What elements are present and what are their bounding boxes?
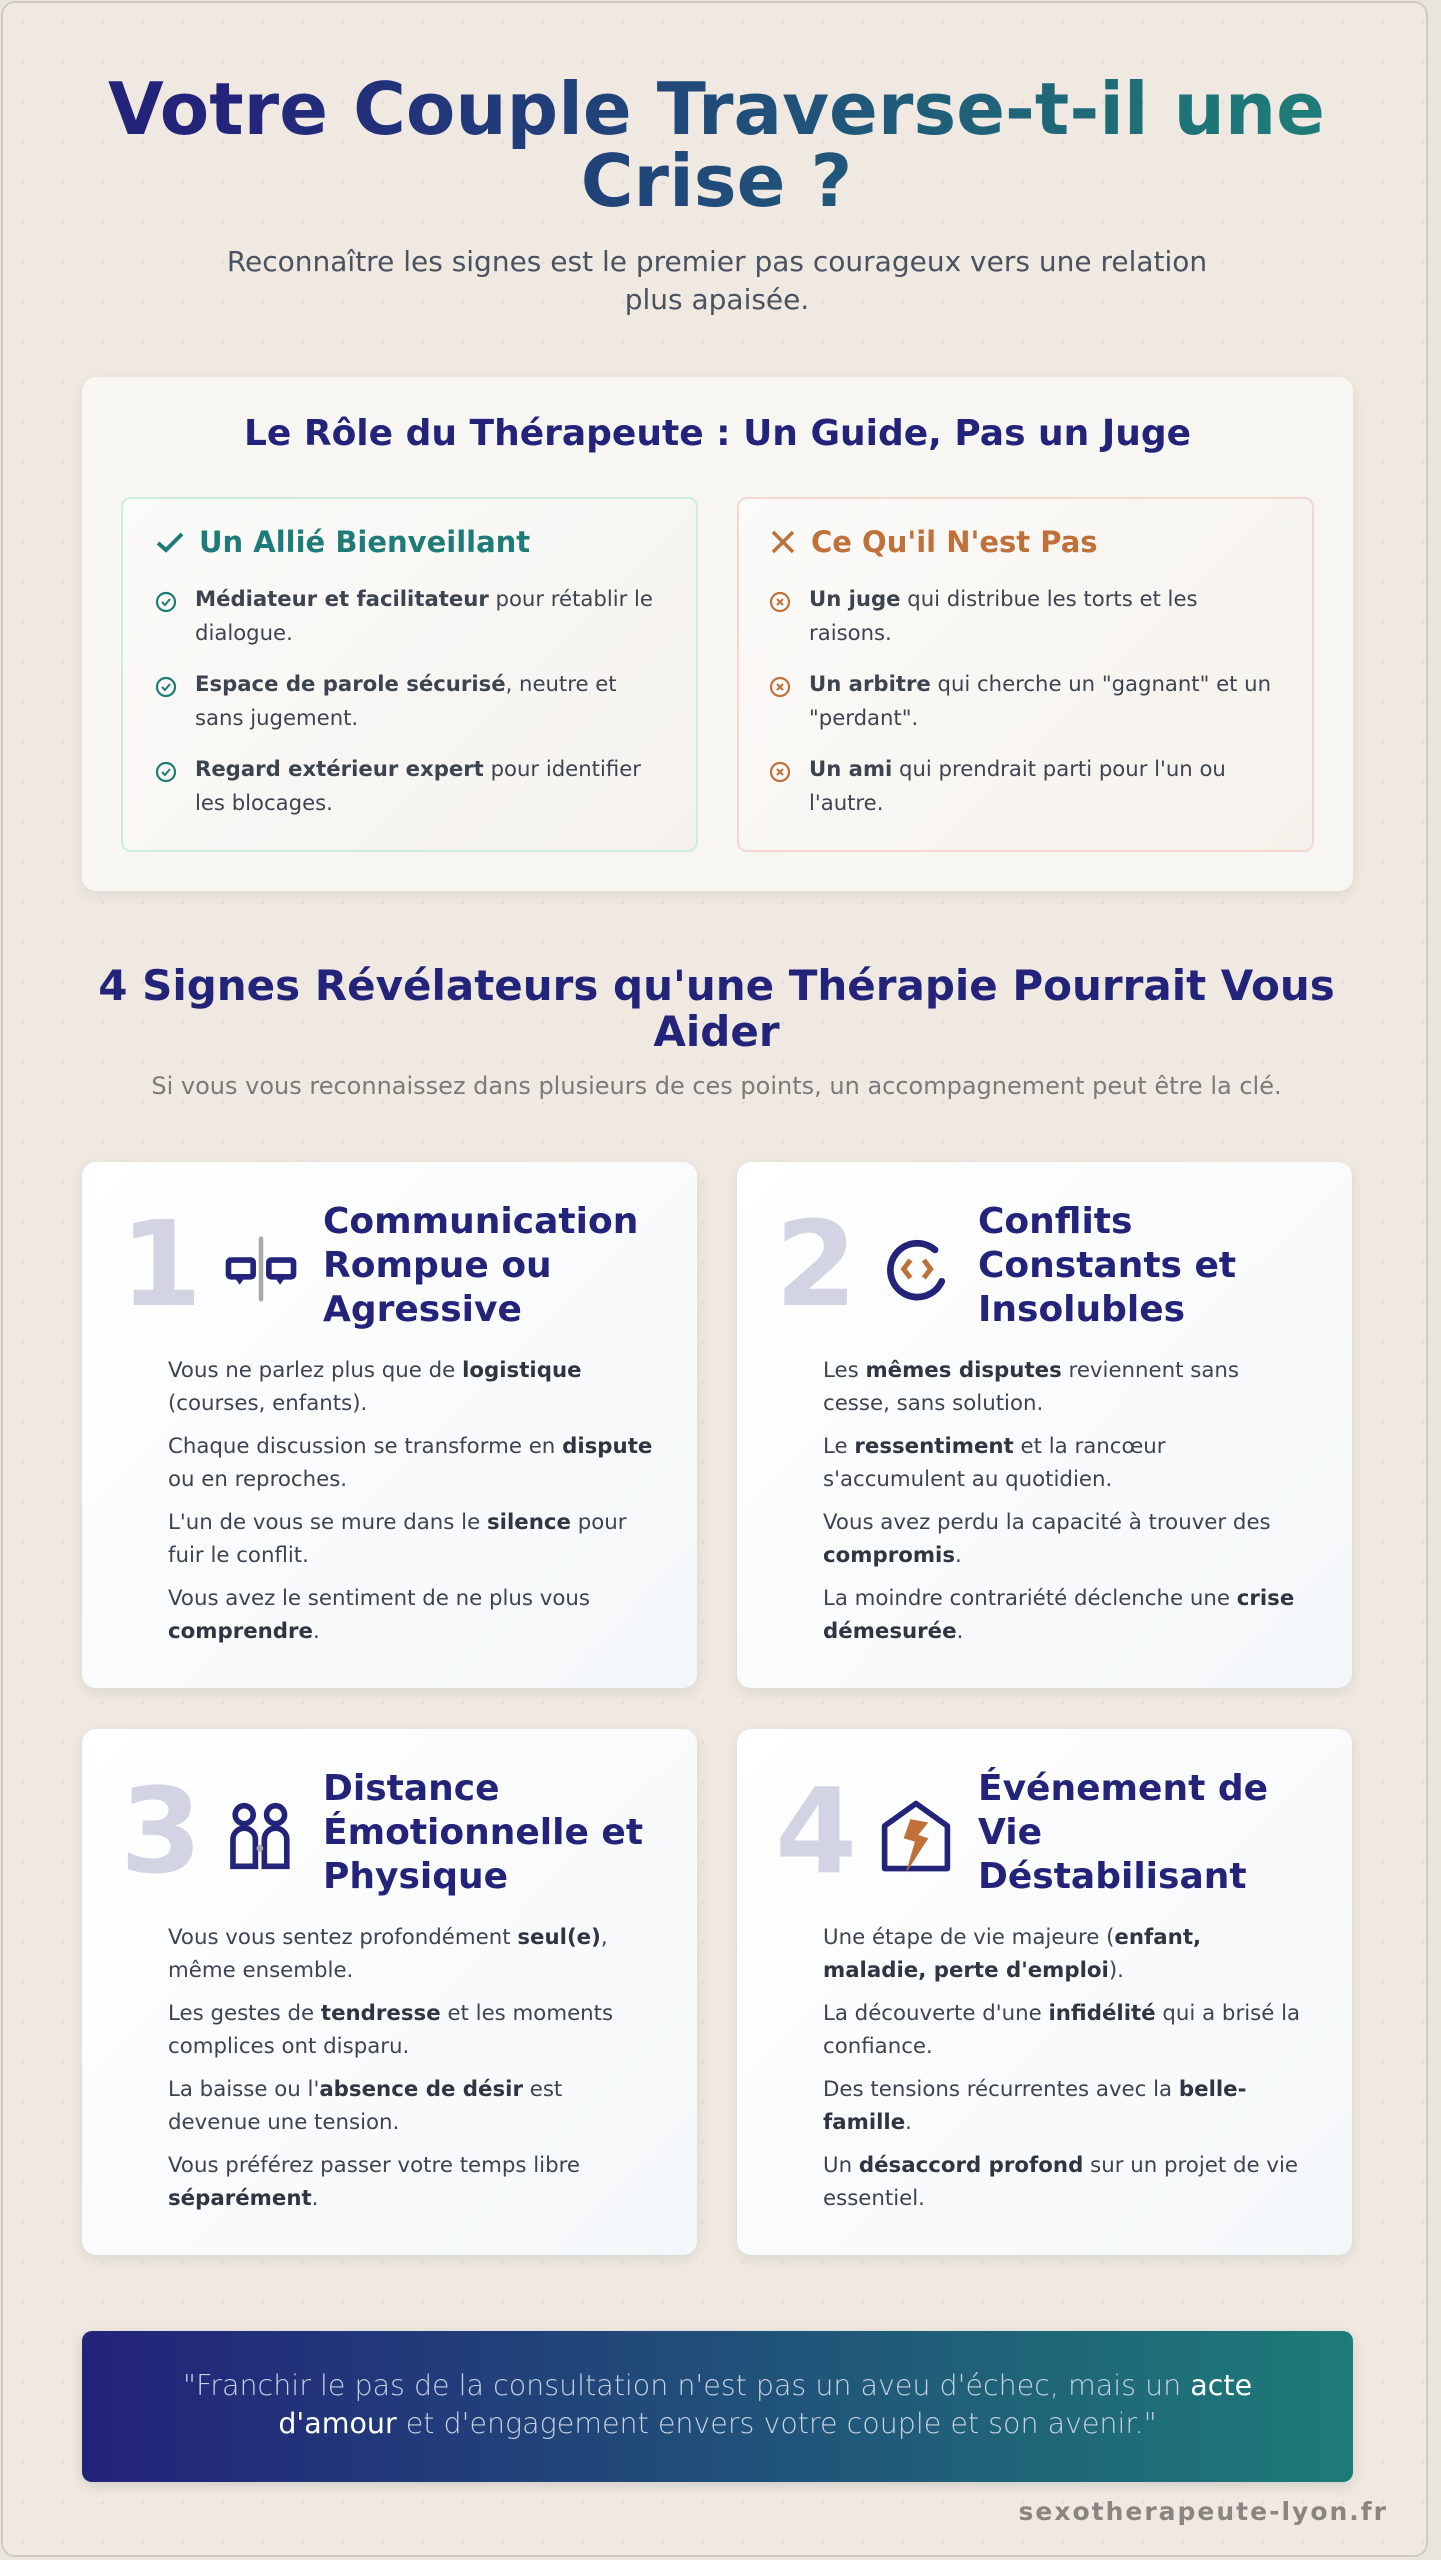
card body: Le ressentiment et la rancœur s'accumulent au quotidien. <box>823 1434 1166 1492</box>
box: what it is not: Un ami qui prendrait parti pour l'un ou l'autre. <box>809 756 1226 815</box>
number 3: 3 <box>120 1762 202 1900</box>
box heading: not: Ce Qu'il N'est Pas <box>811 525 1098 559</box>
card body <box>168 1358 652 1644</box>
card body: Les gestes de tendresse et les moments complices ont disparu. <box>168 2001 613 2059</box>
card body <box>823 1925 1300 2211</box>
icon: house with lightning <box>882 1800 950 1873</box>
footer url: sexotherapeute-lyon.fr <box>1018 2497 1388 2526</box>
card body: Des tensions récurrentes avec la belle-famille. <box>823 2077 1246 2135</box>
card 3: distance <box>82 1729 697 2255</box>
card body: L'un de vous se mure dans le silence pour fuir le conflit. <box>168 1510 626 1568</box>
box: ally <box>121 497 698 852</box>
title <box>3 73 1430 217</box>
box: what it is not: Un arbitre qui cherche un "gagnant" et un "perdant". <box>809 671 1271 730</box>
card body: La découverte d'une infidélité qui a brisé la confiance. <box>823 2001 1300 2059</box>
card title: Événement de Vie Déstabilisant <box>978 1768 1268 1897</box>
card title: Conflits Constants et Insolubles <box>978 1201 1236 1330</box>
card body: Vous préférez passer votre temps libre séparément. <box>168 2153 580 2211</box>
subtitle: Reconnaître les signes est le premier pas courageux vers une relation plus apaisée. <box>227 245 1207 316</box>
box: what it is not: Un juge qui distribue les torts et les raisons. <box>809 586 1198 645</box>
card body: Les mêmes disputes reviennent sans cesse, sans solution. <box>823 1358 1239 1416</box>
icon: two people <box>230 1802 290 1870</box>
number 4: 4 <box>775 1762 857 1900</box>
icon: conflict cycle <box>887 1240 946 1300</box>
number 2: 2 <box>775 1195 857 1333</box>
box: ally: Médiateur et facilitateur pour rétablir le dialogue. <box>195 586 653 645</box>
card 4: life event <box>737 1729 1352 2255</box>
card body: Vous ne parlez plus que de logistique (courses, enfants). <box>168 1358 582 1416</box>
card body: La moindre contrariété déclenche une crise démesurée. <box>823 1586 1294 1644</box>
section subtitle: Si vous vous reconnaissez dans plusieurs de ces points, un accompagnement peut être la clé. <box>151 1072 1282 1100</box>
card body <box>823 1358 1294 1644</box>
icon: broken speech bubbles <box>226 1236 296 1302</box>
title: Votre Couple Traverse-t-il une <box>108 67 1325 151</box>
card 1: communication <box>82 1162 697 1688</box>
card body <box>168 1925 613 2211</box>
quote banner: "Franchir le pas de la consultation n'est pas un aveu d'échec, mais un acte d'amour et d'engagement envers votre couple et son avenir." <box>183 2369 1252 2440</box>
quote banner <box>82 2331 1353 2482</box>
card title: Communication Rompue ou Agressive <box>323 1201 638 1330</box>
number 1: 1 <box>120 1195 202 1333</box>
card body: Vous avez perdu la capacité à trouver des compromis. <box>823 1510 1271 1568</box>
card body: Vous avez le sentiment de ne plus vous comprendre. <box>168 1586 590 1644</box>
box heading: ally: Un Allié Bienveillant <box>199 525 530 559</box>
card body: Vous vous sentez profondément seul(e), même ensemble. <box>168 1925 608 1983</box>
card 2: conflicts <box>737 1162 1352 1688</box>
card body: Un désaccord profond sur un projet de vie essentiel. <box>823 2153 1298 2211</box>
card body: Une étape de vie majeure (enfant, maladie, perte d'emploi). <box>823 1925 1201 1983</box>
title: Crise ? <box>581 139 852 223</box>
box: ally: Espace de parole sécurisé, neutre et sans jugement. <box>195 671 617 730</box>
panel: therapist role <box>82 377 1353 891</box>
panel heading: Le Rôle du Thérapeute : Un Guide, Pas un Juge <box>244 413 1191 454</box>
card body: Chaque discussion se transforme en dispute ou en reproches. <box>168 1434 652 1492</box>
box: what it is not <box>737 497 1314 852</box>
box: ally: Regard extérieur expert pour identifier les blocages. <box>195 756 641 815</box>
card title: Distance Émotionnelle et Physique <box>323 1768 643 1897</box>
section heading: 4 Signes Révélateurs qu'une Thérapie Pourrait Vous Aider <box>98 961 1335 1056</box>
card body: La baisse ou l'absence de désir est devenue une tension. <box>168 2077 562 2135</box>
